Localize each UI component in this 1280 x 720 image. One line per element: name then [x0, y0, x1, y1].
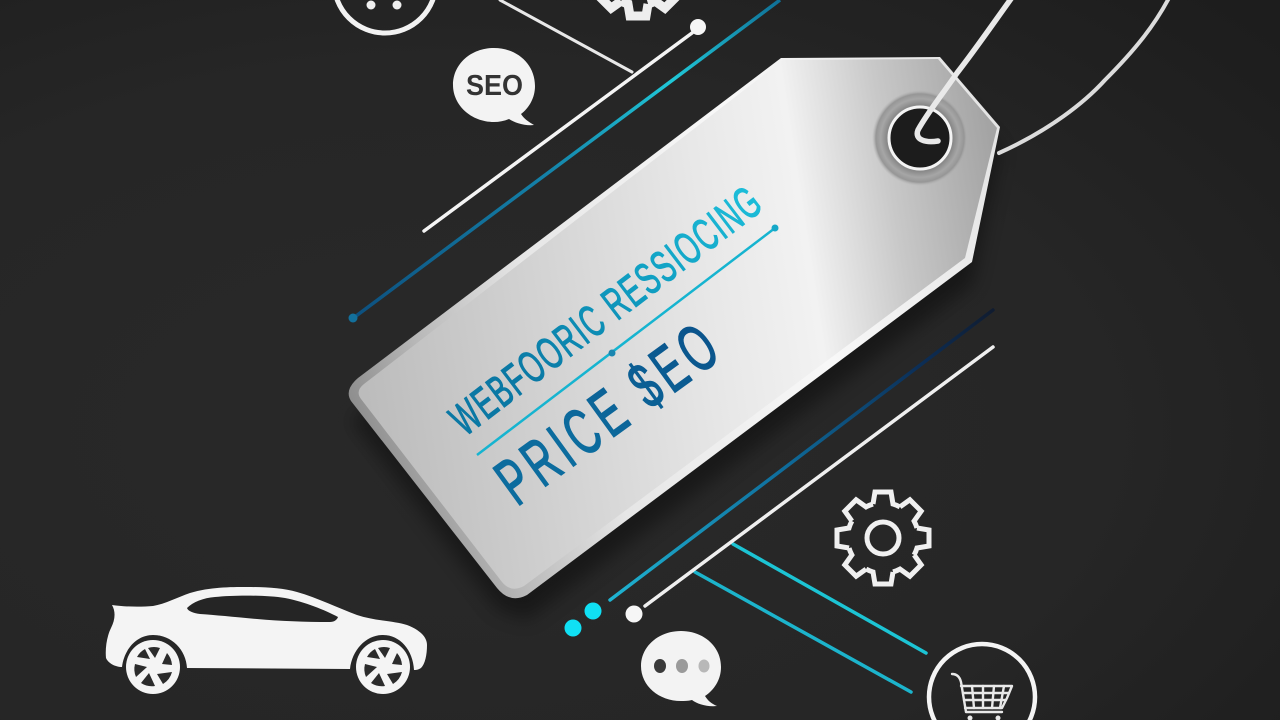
price tag [349, 57, 1000, 620]
icon: SEO speech bubble [453, 48, 535, 125]
tag face [359, 59, 997, 589]
tag text: second line: PRICE $EO [482, 306, 736, 519]
icon: car [106, 587, 427, 694]
string [917, 0, 1170, 153]
icon: chat bubble [641, 631, 721, 706]
rear wheel [126, 640, 180, 694]
lower line group [610, 310, 993, 692]
endpoint dots [564, 602, 642, 636]
tag text: first line: WEBFOORIC RESSIOCING [440, 175, 772, 445]
top white connector lines [424, 0, 706, 231]
front wheel [356, 640, 410, 694]
icon: SEO speech bubble: SEO [466, 70, 523, 102]
icon: gear [837, 492, 929, 584]
eyelet [872, 90, 968, 186]
tag shadow [351, 80, 1000, 620]
tag body edge [349, 57, 1000, 598]
car window [187, 596, 338, 622]
tag divider line [477, 224, 778, 455]
icon: shopping cart in circle [929, 644, 1035, 720]
icon: top-left circle [334, 0, 436, 33]
top teal line [348, 0, 780, 322]
icon: top gear [592, 0, 684, 16]
